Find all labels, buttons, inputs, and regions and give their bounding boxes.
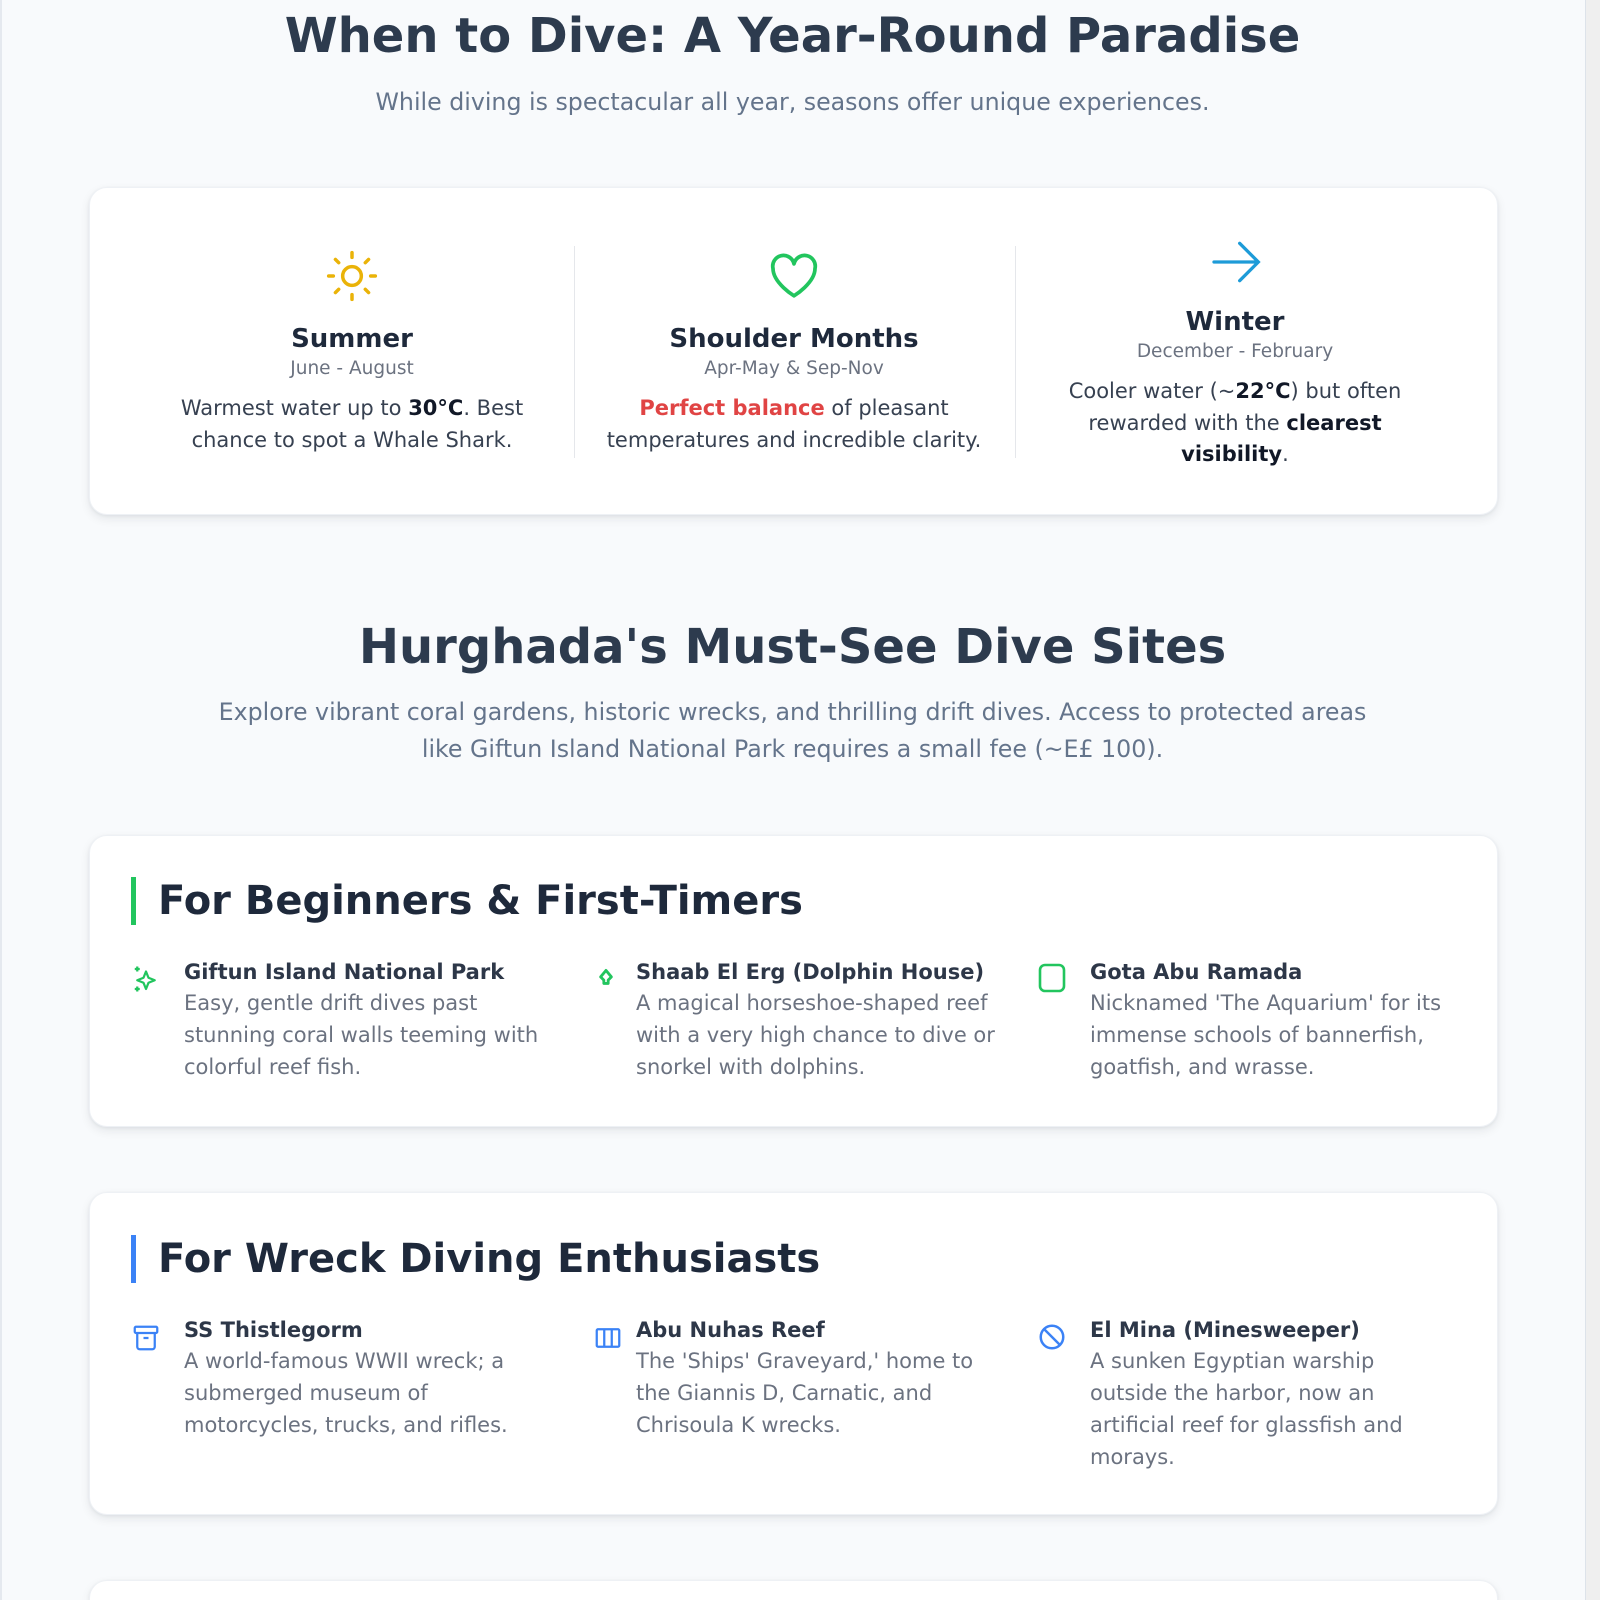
shoulder column: temperatures and incredible clarity. bbox=[607, 428, 981, 452]
panel: beginners: immense schools of bannerfish, bbox=[1090, 1023, 1424, 1047]
winter column: Winter bbox=[1186, 307, 1284, 337]
heading: dive sites: Hurghada's Must-See Dive Sites bbox=[359, 619, 1226, 675]
winter column: December - February bbox=[1137, 341, 1333, 362]
panel: seasons bbox=[89, 187, 1498, 515]
item: Gota Abu Ramada bbox=[1038, 960, 1441, 1079]
icon: heart bbox=[770, 254, 818, 298]
intro text: like Giftun Island National Park requires a small fee (~E£ 100). bbox=[422, 735, 1163, 763]
winter column: rewarded with the clearest bbox=[1088, 410, 1382, 434]
panel: beginners: stunning coral walls teeming with bbox=[184, 1023, 538, 1047]
panel: wreck diving: A world-famous WWII wreck; a bbox=[184, 1349, 504, 1373]
summer column: chance to spot a Whale Shark. bbox=[192, 428, 512, 452]
winter column: visibility. bbox=[1181, 442, 1289, 466]
panel: next section (cut off) bbox=[89, 1580, 1498, 1600]
shoulder column: Apr-May & Sep-Nov bbox=[704, 358, 884, 379]
panel: wreck diving: El Mina (Minesweeper) bbox=[1090, 1318, 1360, 1342]
panel: beginners: with a very high chance to dive or bbox=[636, 1023, 995, 1047]
summer column: Warmest water up to 30°C. Best bbox=[181, 396, 523, 420]
intro text bbox=[219, 698, 1366, 763]
panel: wreck diving: morays. bbox=[1090, 1445, 1175, 1469]
panel: wreck diving: Abu Nuhas Reef bbox=[636, 1318, 825, 1342]
panel: wreck diving: motorcycles, trucks, and rifles. bbox=[184, 1413, 508, 1437]
panel: beginners: colorful reef fish. bbox=[184, 1055, 361, 1079]
panel: beginners bbox=[89, 835, 1498, 1127]
icon: sparkle bbox=[134, 966, 156, 992]
panel: beginners: snorkel with dolphins. bbox=[636, 1055, 865, 1079]
winter column: Cooler water (~22°C) but often bbox=[1069, 379, 1401, 403]
icon: square bbox=[1038, 964, 1066, 992]
panel: beginners: Gota Abu Ramada bbox=[1090, 960, 1302, 984]
heading: wreck: For Wreck Diving Enthusiasts bbox=[158, 1236, 820, 1282]
shoulder column bbox=[607, 254, 981, 452]
summer column: June - August bbox=[290, 358, 414, 379]
item: Shaab El Erg bbox=[599, 960, 995, 1079]
panel: beginners: Giftun Island National Park bbox=[184, 960, 504, 984]
winter column bbox=[1069, 242, 1401, 466]
panel: beginners: Easy, gentle drift dives past bbox=[184, 991, 477, 1015]
panel: wreck diving: the Giannis D, Carnatic, and bbox=[636, 1381, 932, 1405]
panel: wreck diving: The 'Ships' Graveyard,' home to bbox=[636, 1349, 973, 1373]
icon: drop bbox=[599, 968, 613, 985]
item: El Mina bbox=[1040, 1318, 1403, 1469]
panel: wreck diving: artificial reef for glassfish and bbox=[1090, 1413, 1403, 1437]
panel: wreck diving: submerged museum of bbox=[184, 1381, 428, 1405]
panel: wreck diving: SS Thistlegorm bbox=[184, 1318, 363, 1342]
panel: beginners: A magical horseshoe-shaped reef bbox=[636, 991, 987, 1015]
heading: beginners: For Beginners & First-Timers bbox=[158, 878, 803, 924]
item: Giftun bbox=[134, 960, 538, 1079]
subtitle: While diving is spectacular all year, seasons offer unique experiences. bbox=[376, 88, 1209, 116]
icon: columns bbox=[596, 1328, 620, 1348]
item: Thistlegorm bbox=[134, 1318, 508, 1437]
panel: wreck diving: outside the harbor, now an bbox=[1090, 1381, 1374, 1405]
panel: beginners: goatfish, and wrasse. bbox=[1090, 1055, 1314, 1079]
item: Abu Nuhas bbox=[596, 1318, 973, 1437]
icon: arrow bbox=[1212, 242, 1261, 282]
icon: sun bbox=[326, 250, 378, 302]
panel: beginners: Shaab El Erg (Dolphin House) bbox=[636, 960, 984, 984]
icon: archive box bbox=[134, 1326, 158, 1350]
summer column: Summer bbox=[291, 324, 413, 354]
icon: ban bbox=[1040, 1324, 1064, 1350]
panel: wreck diving bbox=[89, 1192, 1498, 1515]
shoulder column: Perfect balance of pleasant bbox=[639, 396, 949, 420]
summer column bbox=[181, 250, 523, 452]
intro text: Explore vibrant coral gardens, historic wrecks, and thrilling drift dives. Access to protected areas bbox=[219, 698, 1366, 726]
title: When to Dive: A Year-Round Paradise bbox=[285, 8, 1300, 64]
panel: beginners: Nicknamed 'The Aquarium' for its bbox=[1090, 991, 1441, 1015]
panel: wreck diving: Chrisoula K wrecks. bbox=[636, 1413, 841, 1437]
panel: wreck diving: A sunken Egyptian warship bbox=[1090, 1349, 1374, 1373]
shoulder column: Shoulder Months bbox=[669, 324, 919, 354]
